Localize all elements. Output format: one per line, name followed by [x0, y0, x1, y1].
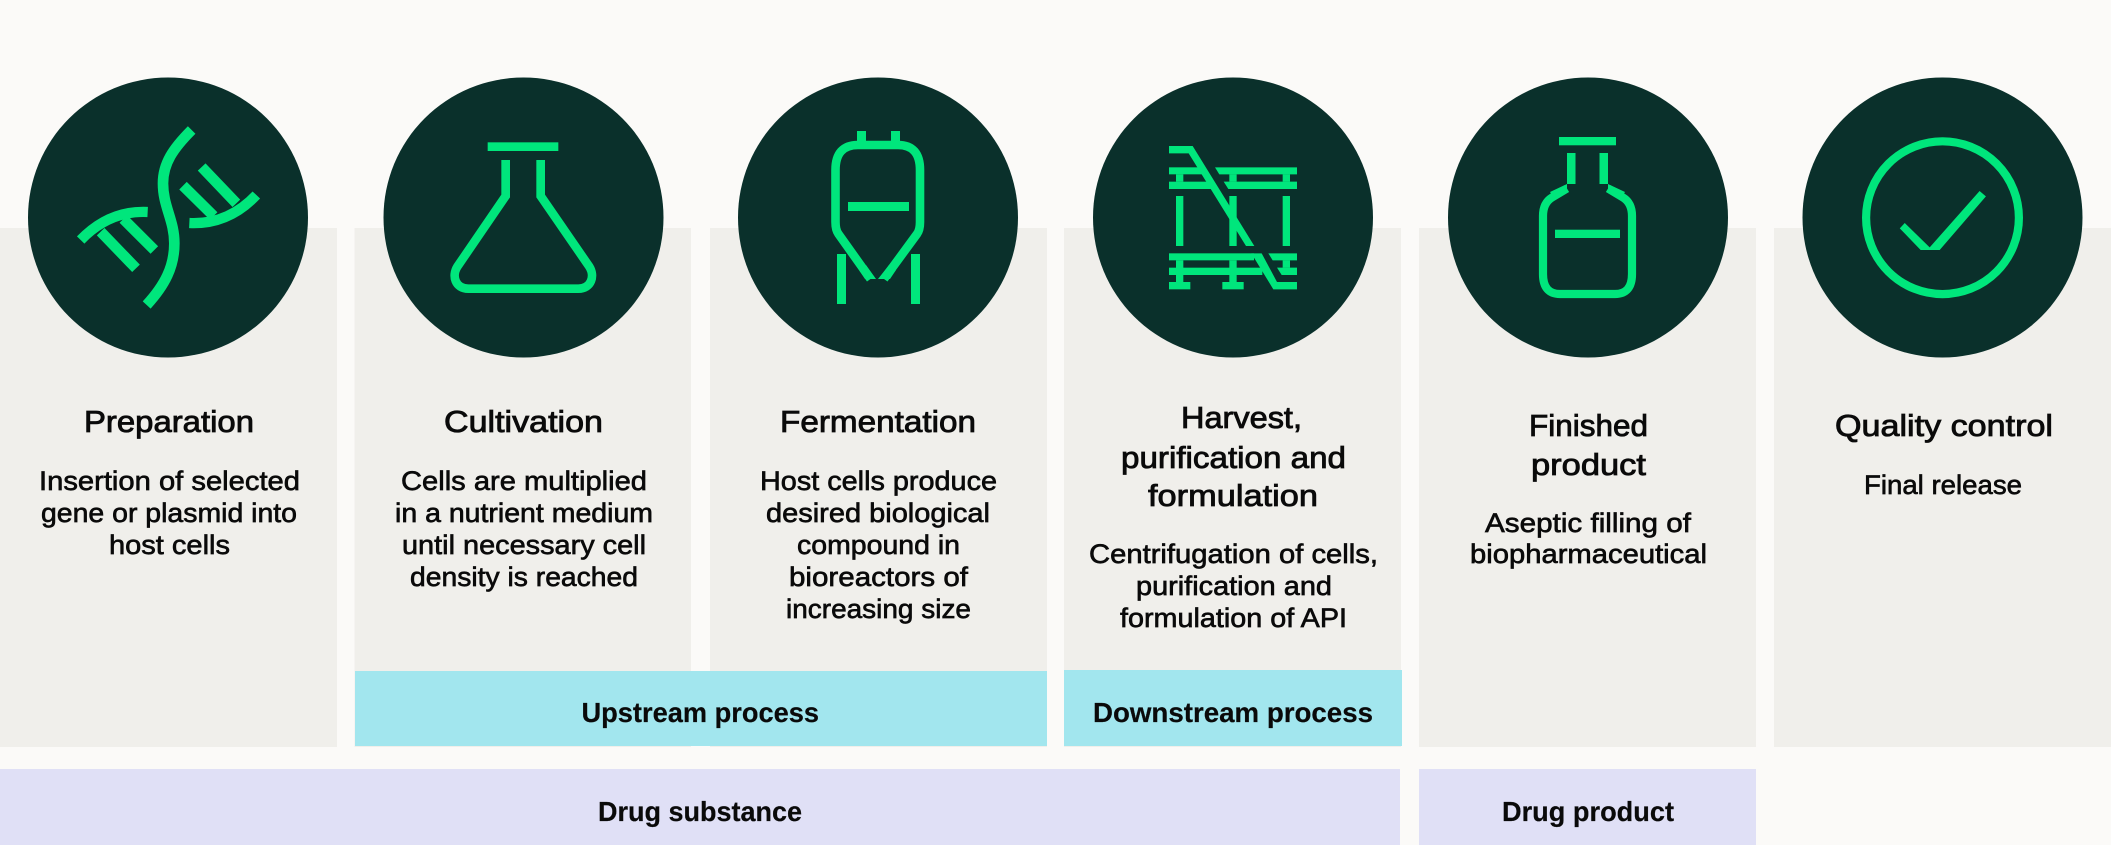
panel: cultivation	[354, 78, 691, 747]
description: harvest	[1089, 539, 1378, 633]
band: drug product: Drug product	[1502, 796, 1674, 827]
heading: Harvest, purification and formulation: formulation	[1148, 478, 1318, 513]
heading: Finished product: product	[1531, 447, 1646, 482]
description: cultivation: in a nutrient medium	[395, 498, 653, 528]
description: cultivation: density is reached	[410, 562, 638, 592]
heading: Harvest, purification and formulation	[1121, 400, 1346, 513]
band: upstream process: Upstream process	[582, 697, 819, 728]
description: fermentation: bioreactors of	[789, 562, 969, 592]
band: downstream process: Downstream process	[1093, 697, 1373, 728]
icon: bioreactor	[738, 78, 1018, 358]
band: drug substance: Drug substance	[598, 796, 802, 827]
description: fermentation	[760, 466, 997, 624]
description: cultivation: Cells are multiplied	[401, 466, 647, 496]
description: preparation: gene or plasmid into	[41, 498, 297, 528]
description: harvest: Centrifugation of cells,	[1089, 539, 1378, 569]
description: preparation	[39, 466, 300, 560]
heading: Finished product: Finished	[1529, 408, 1648, 443]
band: downstream process	[1064, 670, 1402, 746]
icon: purification equipment	[1093, 78, 1373, 358]
heading: Harvest, purification and formulation: Harvest,	[1181, 400, 1302, 435]
description: preparation: Insertion of selected	[39, 466, 300, 496]
icon: check mark	[1802, 78, 2082, 358]
heading: Cultivation: Cultivation	[444, 404, 603, 439]
panel: harvest, purification and formulation	[1064, 78, 1401, 747]
description: fermentation: desired biological	[766, 498, 990, 528]
description: cultivation: until necessary cell	[402, 530, 646, 560]
heading: Preparation: Preparation	[84, 404, 254, 439]
description: cultivation	[395, 466, 653, 592]
heading: Quality control: Quality control	[1835, 408, 2053, 443]
description: harvest: formulation of API	[1120, 603, 1347, 633]
description: quality control: Final release	[1864, 470, 2022, 500]
panel: fermentation	[710, 78, 1047, 747]
icon: bottle	[1448, 78, 1728, 358]
heading: Harvest, purification and formulation: purification and	[1121, 440, 1346, 475]
description: harvest: purification and	[1136, 571, 1332, 601]
description: finished product	[1470, 508, 1707, 569]
description: preparation: host cells	[109, 530, 230, 560]
panel: finished product	[1419, 78, 1756, 747]
band: drug substance	[0, 769, 1400, 845]
band: drug product	[1419, 769, 1756, 845]
description: finished product: Aseptic filling of	[1485, 508, 1692, 538]
icon: flask	[384, 78, 664, 358]
description: fermentation: increasing size	[786, 594, 971, 624]
description: finished product: biopharmaceutical	[1470, 539, 1707, 569]
description: fermentation: compound in	[797, 530, 960, 560]
description: fermentation: Host cells produce	[760, 466, 997, 496]
panel: quality control	[1774, 78, 2111, 747]
band: upstream process	[355, 671, 1047, 746]
heading: Finished product	[1529, 408, 1648, 482]
panel: preparation	[0, 78, 337, 747]
heading: Fermentation: Fermentation	[780, 404, 976, 439]
icon: DNA helix	[28, 78, 308, 358]
